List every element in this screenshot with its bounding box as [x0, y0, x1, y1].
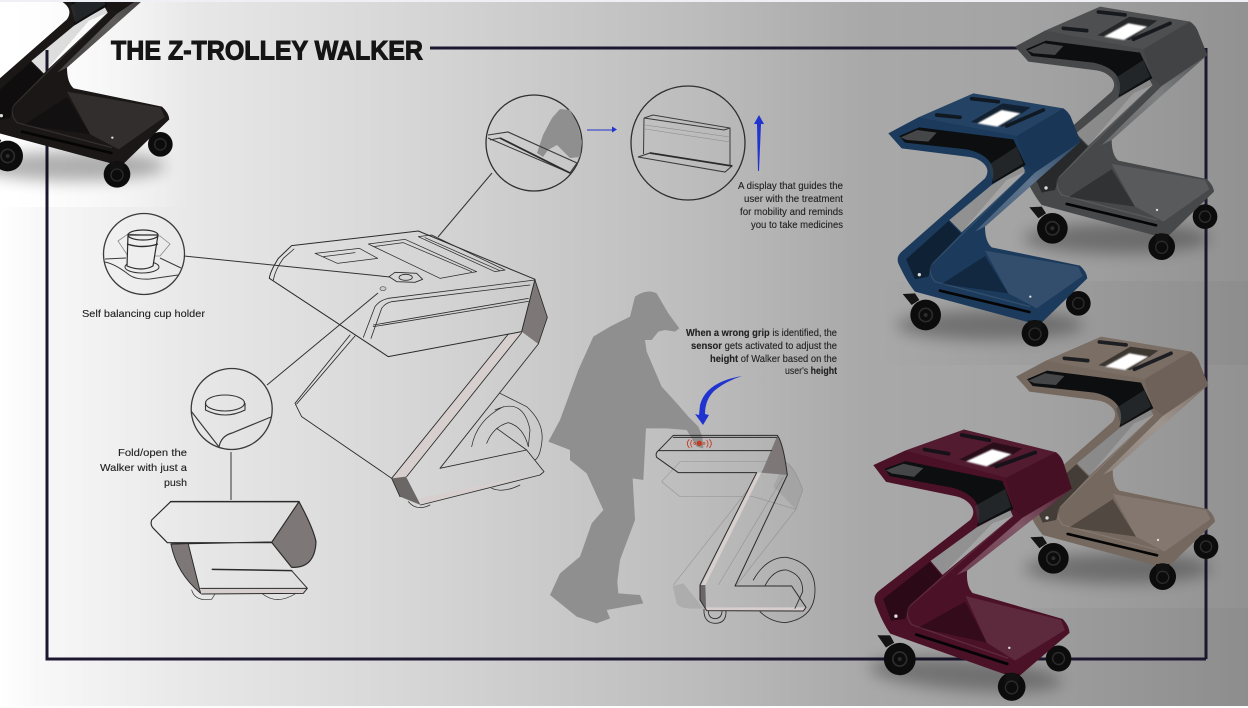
main walker sketch — [269, 231, 547, 508]
title: THE Z-TROLLEY WALKER — [111, 36, 423, 66]
label: fold walker: push — [164, 477, 187, 489]
display detail circle 1 — [486, 95, 582, 191]
label: wrong grip: sensor gets activated to adjust the — [691, 340, 837, 352]
label: display: for mobility and reminds — [740, 206, 843, 218]
render: gray trolley — [1015, 7, 1217, 260]
label: wrong grip: When a wrong grip is identified, the — [686, 327, 837, 339]
display detail circle 2 — [631, 86, 745, 200]
cup holder detail — [104, 214, 184, 294]
label: cup holder: Self balancing cup holder — [82, 308, 206, 320]
label: wrong grip: height of Walker based on the — [710, 353, 837, 365]
arrow — [587, 126, 617, 132]
arrow — [754, 115, 764, 171]
label: fold walker — [100, 447, 187, 489]
render: black trolley — [0, 0, 173, 188]
label: display: you to take medicines — [751, 219, 843, 231]
user figure with adjustable walker — [548, 291, 815, 623]
label: wrong grip — [686, 327, 837, 377]
label: fold walker: Walker with just a — [100, 462, 187, 474]
curved arrow — [695, 376, 742, 425]
render: tan trolley — [1016, 337, 1218, 590]
label: fold walker: Fold/open the — [118, 447, 187, 459]
leader lines — [184, 173, 492, 500]
knob detail — [191, 368, 272, 450]
label: display — [738, 180, 843, 231]
render: maroon trolley — [859, 423, 1085, 705]
label: wrong grip: user's height — [785, 365, 837, 377]
label: display: user with the treatment — [744, 193, 843, 205]
folded walker sketch — [151, 502, 316, 600]
render: blue trolley — [888, 93, 1091, 347]
label: display: A display that guides the — [738, 180, 843, 192]
